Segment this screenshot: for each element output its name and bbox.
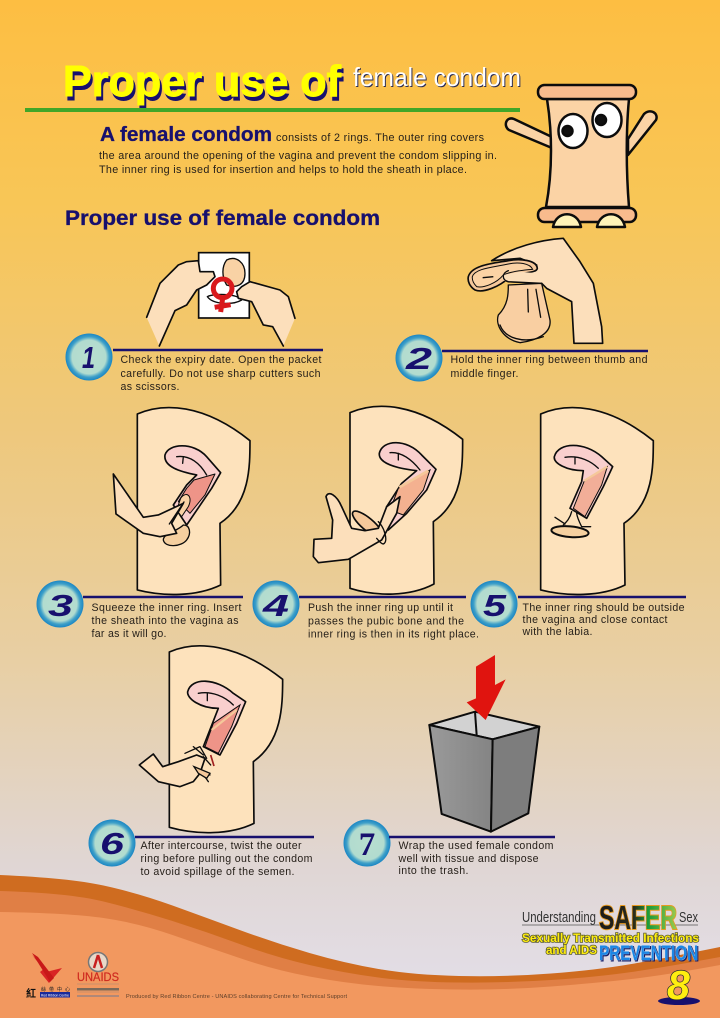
step 4 text: Push the inner ring up until it bbox=[308, 602, 453, 614]
series logo: Understanding Safer Sex: Sex bbox=[679, 909, 698, 926]
step 1 badge: 1 bbox=[82, 340, 95, 375]
intro text: A female condom bbox=[100, 123, 272, 146]
step 5 text bbox=[518, 597, 686, 638]
step 4 badge bbox=[252, 580, 300, 628]
step 5 badge: 5 bbox=[483, 588, 507, 623]
step 6 text: ring before pulling out the condom bbox=[140, 853, 313, 865]
step 3 text: the sheath into the vagina as bbox=[92, 615, 238, 627]
intro text: consists of 2 rings. The outer ring covers bbox=[276, 132, 485, 144]
producer credit: Produced by Red Ribbon Centre - UNAIDS collaborating Centre for Technical Support bbox=[126, 994, 347, 1000]
step 7 text: into the trash. bbox=[398, 865, 468, 877]
step 2 badge: 2 bbox=[404, 341, 432, 376]
step 6 text bbox=[135, 837, 314, 878]
step 4 text: passes the pubic bone and the bbox=[308, 616, 464, 628]
intro text bbox=[99, 123, 497, 176]
step 7 text: Wrap the used female condom bbox=[398, 840, 554, 852]
step 3 text: Squeeze the inner ring. Insert bbox=[92, 602, 242, 614]
step 4 badge: 4 bbox=[261, 588, 289, 623]
step 4 text bbox=[299, 597, 479, 640]
step 6 badge: 6 bbox=[100, 826, 125, 861]
step 3 badge bbox=[36, 580, 84, 628]
step 5 illustration: ring in place bbox=[541, 408, 653, 594]
logo: Red Ribbon Centre: 紅 bbox=[26, 987, 36, 1000]
step 3 text bbox=[83, 597, 243, 640]
logo: UNAIDS bbox=[77, 952, 119, 997]
step 1 illustration: opening the packet bbox=[147, 253, 295, 346]
series logo: Understanding Safer Sex bbox=[522, 899, 699, 966]
step 4 illustration: pushing the inner ring up bbox=[313, 406, 463, 594]
intro text: The inner ring is used for insertion and helps to hold the sheath in place. bbox=[99, 164, 467, 176]
step 5 text: with the labia. bbox=[522, 626, 592, 638]
step 7 text: well with tissue and dispose bbox=[398, 853, 539, 865]
step 1 badge bbox=[66, 334, 112, 380]
bottom wave bbox=[0, 875, 720, 1018]
step 7 badge: 7 bbox=[359, 827, 375, 863]
title: Proper use of bbox=[65, 61, 343, 110]
logo: Red Ribbon Centre bbox=[26, 953, 70, 1000]
logo: UNAIDS: UNAIDS bbox=[77, 972, 119, 984]
step 1 text: carefully. Do not use sharp cutters such bbox=[120, 368, 321, 380]
page number 8: 8 bbox=[667, 962, 690, 1008]
step 5 text: The inner ring should be outside bbox=[522, 602, 685, 614]
step 6 text: After intercourse, twist the outer bbox=[140, 840, 302, 852]
step 1 text: Check the expiry date. Open the packet bbox=[120, 354, 322, 366]
logo: Red Ribbon Centre: 絲帶中心 bbox=[41, 986, 70, 993]
step 1 text bbox=[113, 350, 323, 393]
mascot bbox=[506, 85, 657, 227]
step 3 badge: 3 bbox=[48, 588, 73, 623]
step 2 illustration: holding inner ring bbox=[468, 238, 603, 343]
step 4 text: inner ring is then in its right place. bbox=[308, 628, 479, 640]
step 3 illustration: inserting the sheath bbox=[113, 408, 250, 594]
step 3 text: far as it will go. bbox=[92, 628, 166, 640]
step 5 text: the vagina and close contact bbox=[522, 614, 668, 626]
title: female condom bbox=[353, 62, 521, 92]
step 2 text: Hold the inner ring between thumb and bbox=[450, 354, 648, 366]
step 2 text bbox=[442, 351, 648, 380]
logo: Red Ribbon Centre: Red Ribbon Centre bbox=[41, 993, 70, 998]
step 2 badge bbox=[396, 334, 442, 382]
step 6 illustration: twisting the outer ring bbox=[139, 646, 283, 833]
step 5 badge bbox=[470, 580, 518, 628]
step 6 text: to avoid spillage of the semen. bbox=[140, 866, 294, 878]
intro text: the area around the opening of the vagina and prevent the condom slipping in. bbox=[99, 150, 497, 162]
step 2 text: middle finger. bbox=[450, 368, 518, 380]
step 6 badge bbox=[88, 820, 136, 866]
series logo: Understanding Safer Sex: and AIDS bbox=[546, 943, 597, 957]
title underline bbox=[25, 108, 520, 112]
title bbox=[63, 57, 522, 110]
step 7 illustration: trash bin with red arrow bbox=[429, 655, 539, 832]
series logo: Understanding Safer Sex: SAFER bbox=[599, 899, 677, 936]
step 1 text: as scissors. bbox=[120, 381, 180, 393]
title: female condom bbox=[354, 63, 522, 93]
title: Proper use of bbox=[63, 57, 341, 106]
step 7 text bbox=[389, 837, 555, 877]
section heading: Proper use of female condom bbox=[65, 207, 380, 230]
page number 8 bbox=[658, 962, 700, 1008]
series logo: Understanding Safer Sex: Understanding bbox=[522, 909, 596, 926]
series logo: Understanding Safer Sex: Sexually Transmitted Infections bbox=[522, 931, 699, 945]
step 7 badge bbox=[344, 820, 390, 866]
